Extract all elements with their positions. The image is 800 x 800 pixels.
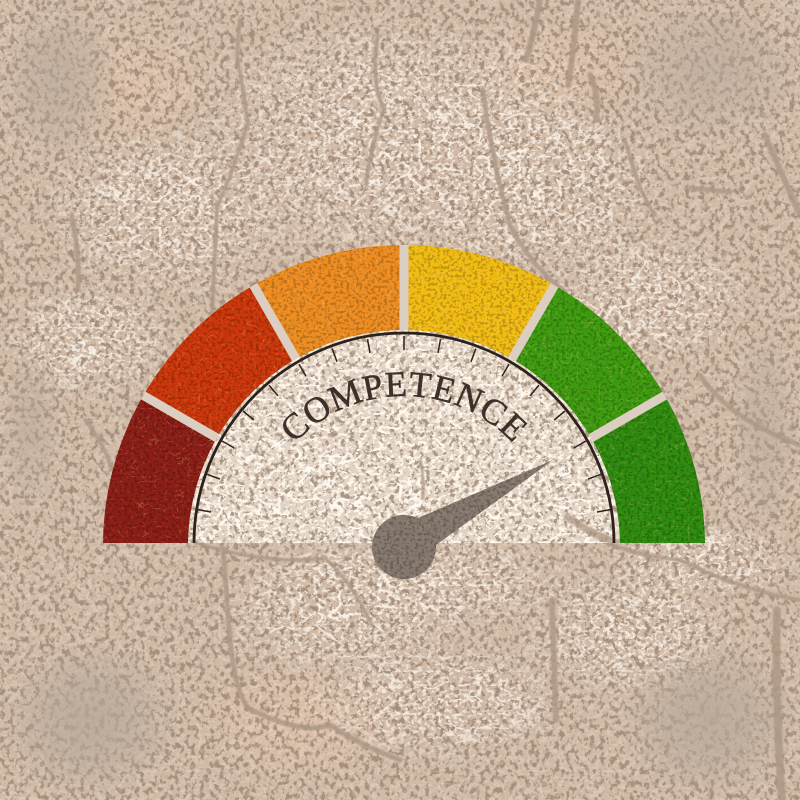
segment 1: dark red [103, 396, 217, 546]
segment 4: yellow [404, 245, 554, 359]
segment 3: orange [254, 245, 404, 359]
dial cracks [188, 459, 620, 543]
segment stone texture [100, 240, 710, 550]
gap lines between coloured segments [143, 245, 665, 438]
segment 6: green [591, 396, 705, 546]
segment 2: red-orange [143, 285, 296, 438]
segment 5: bright green [512, 285, 665, 438]
gauge: light dial face [188, 330, 620, 543]
gauge title: COMPETENCE: COMPETENCE [283, 372, 528, 442]
colour scale: six segments [100, 240, 710, 550]
needle pointing into the green zone [372, 460, 553, 579]
scale arc with tick marks [194, 333, 614, 543]
